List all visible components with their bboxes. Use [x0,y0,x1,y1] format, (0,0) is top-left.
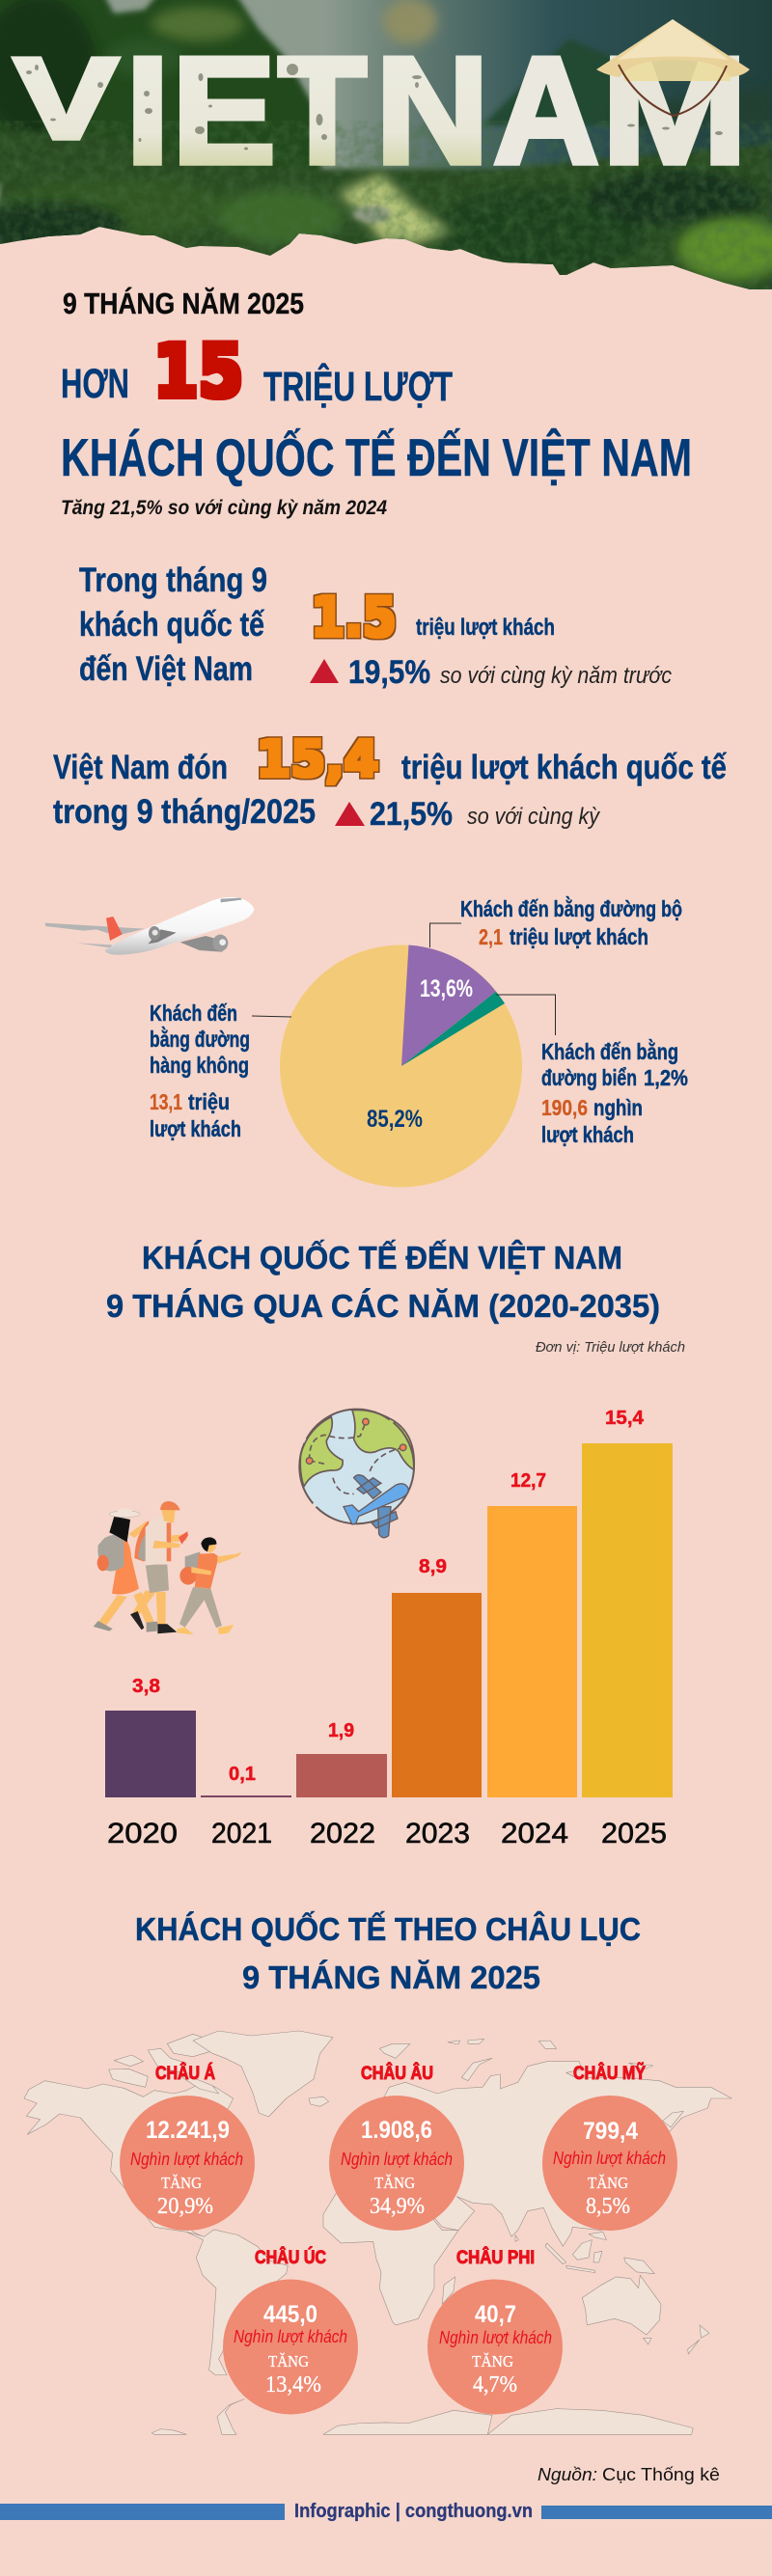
bar chart: 2020–2025: 3,8 [132,1676,160,1697]
section heading: theo châu lục: 9 THÁNG NĂM 2025 [242,1959,540,1995]
section heading: 9 tháng qua các năm [106,1239,660,1324]
circle: Châu Phi: 40,7 [475,2301,516,2328]
hero title letters VIETNAM [14,26,748,196]
circle: Châu Âu: Nghìn lượt khách [341,2150,453,2169]
stat block: tháng 9: đến Việt Nam [79,650,253,688]
pie chart: phương tiện đến [280,945,522,1187]
callout lines [252,923,556,1035]
label: đường biển: nghìn [593,1095,643,1120]
circle: Châu Mỹ: CHÂU MỸ [573,2063,646,2084]
circle: Châu Mỹ: 799,4 [583,2118,638,2145]
bar chart: 2020–2025: 12,7 [510,1470,546,1492]
label: đường biển [541,1038,688,1147]
circle: Châu Phi: 4,7% [473,2372,517,2398]
subtitle: Tăng 21,5% so với cùng kỳ năm 2024 [61,497,387,519]
stat block: 9 tháng [53,731,727,833]
label: đường bộ: Khách đến bằng đường bộ [460,895,682,921]
label: đường biển: Khách đến bằng [541,1038,678,1064]
main headline: 15 [153,328,243,414]
circle: Châu Âu: TĂNG [374,2174,415,2192]
circle: Châu Úc: CHÂU ÚC [255,2247,326,2268]
section heading: 9 tháng qua các năm: KHÁCH QUỐC TẾ ĐẾN VIỆT NAM [142,1239,622,1275]
label: đường biển: lượt khách [541,1122,634,1147]
label: đường hàng không: lượt khách [150,1116,241,1141]
bar chart: 2020–2025: 1,9 [328,1720,354,1741]
eyebrow: 9 tháng năm 2025: 9 THÁNG NĂM 2025 [63,287,304,320]
hero title letters VIETNAM: E [172,26,276,196]
world map [24,2031,731,2434]
label: đường biển: 190,6 [541,1095,588,1120]
label: đường bộ [460,895,682,949]
bar chart: 2020–2025: 2025 [601,1818,667,1850]
source note: Nguồn: [538,2465,597,2484]
circle: Châu Á: TĂNG [161,2174,202,2192]
hero title letters VIETNAM: I [125,26,170,196]
circle: Châu Úc: Nghìn lượt khách [234,2327,347,2346]
hero title letters VIETNAM: A [493,26,599,196]
pie chart: phương tiện đến: 85,2% [367,1106,423,1133]
unit note: Đơn vị: Triệu lượt khách [536,1339,685,1356]
circle: Châu Á: 12.241,9 [146,2117,230,2144]
stat block: tháng 9: 19,5% [348,654,430,691]
hero title letters VIETNAM: V [14,35,118,163]
stat block: tháng 9: 1.5 [311,587,396,649]
bar chart: 2020–2025: 15,4 [605,1408,645,1429]
stat block: 9 tháng: so với cùng kỳ [467,804,601,830]
circle: Châu Á [120,2063,255,2231]
source note: Cục Thống kê [602,2465,720,2484]
label: đường biển: đường biển [541,1065,637,1090]
circle: Châu Úc: 445,0 [263,2301,317,2328]
circle: Châu Âu: CHÂU ÂU [361,2063,433,2084]
bar chart: 2020–2025: 2022 [310,1818,375,1850]
stat block: tháng 9: so với cùng kỳ năm trước [440,663,672,689]
bar chart: 2020–2025: 8,9 [419,1556,447,1577]
label: đường hàng không: hàng không [150,1053,249,1078]
hero title letters VIETNAM: T [278,26,367,196]
hero title letters VIETNAM: M [601,26,748,196]
circle: Châu Phi: TĂNG [472,2352,513,2370]
label: đường hàng không: bằng đường [150,1026,250,1052]
hero illustration: conical hat [596,19,750,116]
main headline [61,328,692,487]
stat block: 9 tháng: trong 9 tháng/2025 [53,793,316,831]
bar chart: 2020–2025: 2020 [107,1818,178,1850]
stat block: tháng 9: triệu lượt khách [416,615,555,641]
circle: Châu Mỹ: 8,5% [586,2194,630,2219]
label: đường hàng không: Khách đến [150,1000,237,1026]
main headline: TRIỆU LƯỢT [263,363,453,410]
icon: airplane [45,897,254,955]
section heading: 9 tháng qua các năm: 9 THÁNG QUA CÁC NĂM (2020-2035) [106,1288,660,1324]
bar chart: 2020–2025: 2023 [405,1818,470,1850]
bar chart: 2020–2025: 0,1 [229,1764,256,1785]
stat block: tháng 9 [79,562,672,691]
circle: Châu Úc: 13,4% [265,2372,321,2398]
icon: globe with plane [299,1410,414,1538]
circle: Châu Âu: 1.908,6 [361,2117,432,2144]
bar chart: 2020–2025: 2024 [501,1818,568,1850]
circle: Châu Úc: TĂNG [268,2352,309,2370]
stat block: 9 tháng: Việt Nam đón [53,749,228,786]
circle: Châu Mỹ: Nghìn lượt khách [553,2149,666,2168]
label: đường biển: 1,2% [644,1065,688,1090]
stat block: tháng 9: khách quốc tế [79,606,264,644]
label: đường hàng không: 13,1 [150,1089,182,1114]
hero image: Vietnam mountains [0,0,772,299]
circle: Châu Mỹ [542,2063,677,2231]
label: đường bộ: triệu lượt khách [510,924,648,949]
circle: Châu Á: 20,9% [157,2194,213,2219]
circle: Châu Âu [329,2063,464,2231]
section heading: theo châu lục: KHÁCH QUỐC TẾ THEO CHÂU LỤC [135,1910,641,1947]
bar chart: 2020–2025: 2021 [211,1818,272,1850]
circle: Châu Phi [427,2247,563,2414]
stat block: tháng 9: Trong tháng 9 [79,562,267,599]
illustration: travellers [94,1501,242,1634]
circle: Châu Úc [223,2247,358,2414]
label: đường hàng không [150,1000,250,1141]
circle: Châu Mỹ: TĂNG [588,2174,628,2192]
circle: Châu Á: Nghìn lượt khách [130,2150,243,2169]
footer bar and credit: Infographic | congthuong.vn [294,2501,533,2522]
circle: Châu Phi: CHÂU PHI [456,2247,535,2268]
label: đường bộ: 2,1 [479,924,503,949]
source note [538,2465,720,2484]
label: đường hàng không: triệu [188,1089,230,1114]
bar chart: 2020–2025 [105,1408,673,1850]
circle: Châu Phi: Nghìn lượt khách [439,2328,552,2347]
stat block: 9 tháng: 21,5% [370,796,453,833]
hero title letters VIETNAM: N [375,26,489,196]
circle: Châu Á: CHÂU Á [155,2063,215,2084]
circle: Châu Âu: 34,9% [370,2194,425,2219]
section heading: theo châu lục [135,1910,641,1995]
stat block: 9 tháng: 15,4 [257,731,378,789]
main headline: HƠN [61,361,129,407]
pie chart: phương tiện đến: 13,6% [420,975,473,1002]
footer bar and credit [0,2501,772,2522]
